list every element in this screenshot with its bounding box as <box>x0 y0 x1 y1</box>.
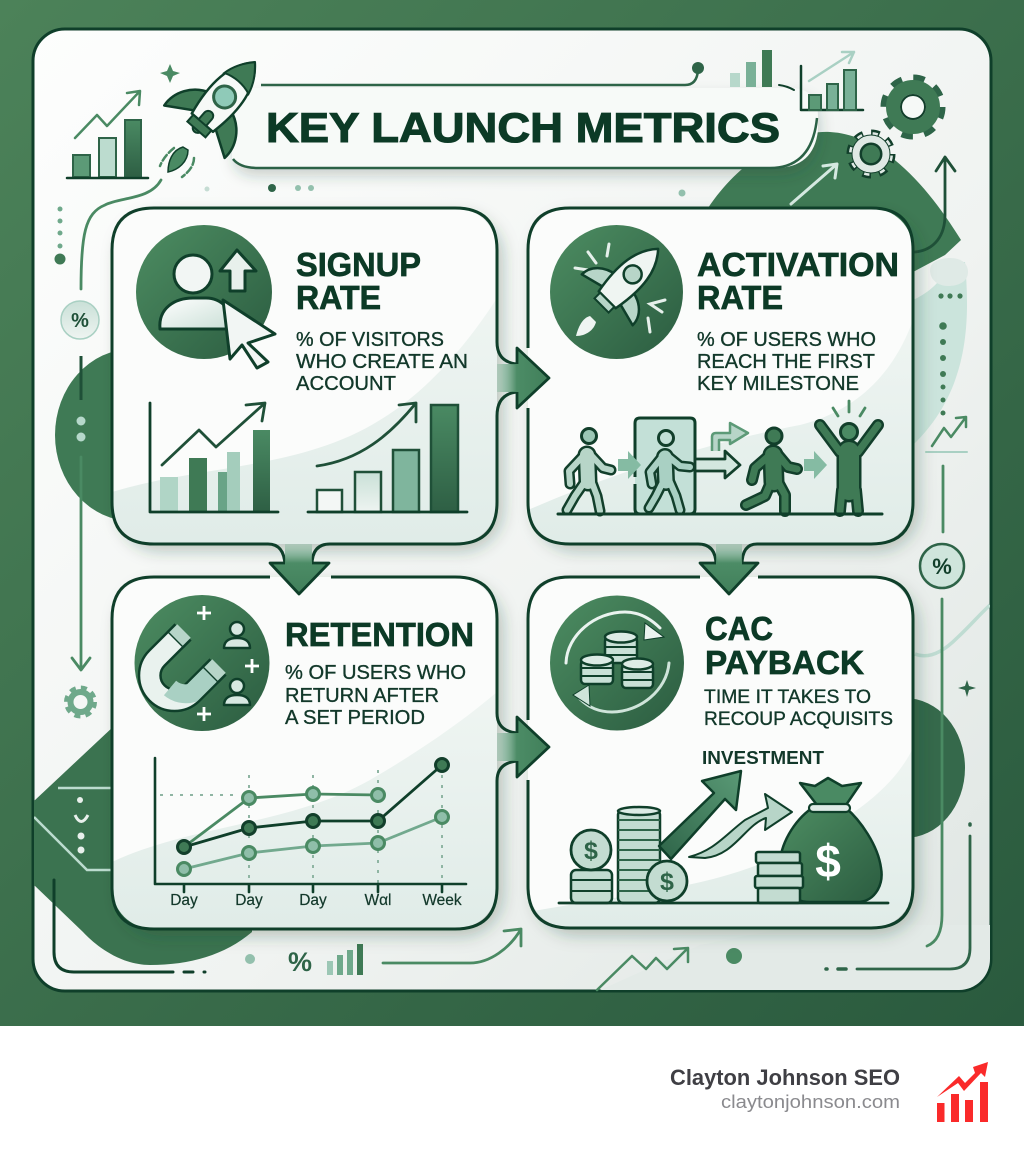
walker 2 <box>649 430 690 510</box>
heading: cac payback: PAYBACK <box>705 644 864 681</box>
icon: sparkle <box>160 64 180 83</box>
flow diagram: user journey <box>558 401 882 514</box>
arrow bent <box>712 423 748 451</box>
arrow 1 <box>618 451 641 479</box>
description: activation rate: REACH THE FIRST <box>697 351 875 373</box>
icon: user signup <box>136 225 275 368</box>
bar chart: rising bars <box>308 403 467 512</box>
coin stack left: $ <box>584 837 598 865</box>
icon: percent badge left <box>61 301 99 339</box>
arrow 2 <box>804 451 827 479</box>
icon: sparkle right <box>958 680 976 697</box>
decor: bottom-left line <box>54 880 205 972</box>
heading: cac payback <box>705 610 864 681</box>
walker 3 <box>746 428 797 511</box>
icon: large gear <box>885 79 941 135</box>
description: retention: A SET PERIOD <box>285 707 425 729</box>
icon: top-left growth chart <box>67 91 148 178</box>
decor: left vertical line with arrow <box>72 356 90 670</box>
decor: bottom percent and bars <box>245 944 363 977</box>
money bag: $ <box>815 835 841 887</box>
arrow: signup to activation <box>497 348 549 408</box>
footer brand text: Clayton Johnson SEO <box>670 1065 900 1090</box>
icon: left gear <box>68 689 94 715</box>
decor: bottom-right lines <box>826 599 970 969</box>
panel: retention <box>112 577 517 929</box>
heading: signup rate: SIGNUP <box>296 246 421 283</box>
line chart: retention curves: Week <box>422 892 462 909</box>
walker 1 <box>567 428 611 511</box>
arrow: bottom curved line <box>383 929 521 963</box>
line chart: retention curves: Day <box>170 892 198 909</box>
title: KEY LAUNCH METRICS <box>266 104 780 151</box>
decor: bottom dot <box>726 948 742 964</box>
description: signup rate: % OF VISITORS <box>296 329 444 351</box>
icon: percent badge right <box>920 544 964 588</box>
illustration: coins, arrows, money bag <box>559 771 888 903</box>
decor: right dotted trail <box>926 293 967 532</box>
description: activation rate <box>697 329 876 395</box>
decor: connector and dots <box>54 180 686 289</box>
icon: small gear <box>851 134 891 174</box>
decor: bottom zigzag <box>597 948 688 990</box>
description: activation rate: % OF USERS WHO <box>697 329 876 351</box>
footer brand text <box>670 1065 900 1112</box>
description: cac payback: RECOUP ACQUISITS <box>704 709 893 730</box>
icon: top right small bars <box>730 50 794 90</box>
money bag <box>780 778 882 902</box>
icon: top right chart <box>801 52 863 110</box>
title banner <box>232 62 818 168</box>
footer brand text: claytonjohnson.com <box>721 1091 900 1112</box>
arrow: signup to retention <box>270 544 329 594</box>
arrow: light diagonal in blob <box>791 164 837 204</box>
person celebrating <box>820 401 878 511</box>
icon: coins cycle <box>550 596 684 730</box>
line chart: retention curves: Wαl <box>364 892 392 909</box>
heading: signup rate <box>296 246 421 316</box>
heading: signup rate: RATE <box>296 279 381 316</box>
line chart: retention curves: Day <box>299 892 327 909</box>
icon: percent badge left: % <box>71 310 89 332</box>
icon: percent badge right: % <box>932 554 952 579</box>
description: activation rate: KEY MILESTONE <box>697 373 859 395</box>
description: cac payback <box>704 687 893 730</box>
icon: rocket launch <box>550 223 684 359</box>
background blobs <box>34 132 992 992</box>
description: retention <box>285 662 466 729</box>
heading: activation rate: RATE <box>697 279 783 316</box>
line chart: retention curves: Day <box>235 892 263 909</box>
heading: retention: RETENTION <box>285 616 474 653</box>
icon: rocket with flame <box>160 36 285 177</box>
line chart: retention curves <box>155 758 466 909</box>
main panel <box>33 29 991 991</box>
label: investment: INVESTMENT <box>702 748 824 768</box>
heading: activation rate <box>697 246 899 316</box>
panel: cac payback <box>528 577 913 928</box>
description: cac payback: TIME IT TAKES TO <box>704 687 871 708</box>
arrow: up arrow right <box>915 157 955 252</box>
arrow outlined <box>695 451 740 478</box>
description: retention: % OF USERS WHO <box>285 662 466 684</box>
footer logo <box>937 1062 988 1122</box>
small coin stack <box>755 852 803 903</box>
coin stack left <box>571 830 612 903</box>
bar chart: combo <box>150 403 278 512</box>
heading: cac payback: CAC <box>705 610 773 647</box>
doorway <box>635 418 695 514</box>
front coin <box>647 861 687 901</box>
big diagonal arrow <box>659 771 741 859</box>
description: retention: RETURN AFTER <box>285 685 439 707</box>
arrow: activation to cac <box>700 544 758 594</box>
tall coin stack <box>618 807 660 903</box>
front coin: $ <box>660 868 674 896</box>
icon: magnet and users <box>134 595 270 731</box>
wavy light arrow <box>689 794 792 858</box>
decor: bottom percent and bars: % <box>288 947 312 977</box>
description: signup rate: WHO CREATE AN <box>296 351 468 373</box>
arrow: retention to cac <box>497 717 549 777</box>
panel: activation rate <box>528 208 913 565</box>
description: signup rate: ACCOUNT <box>296 373 396 395</box>
heading: activation rate: ACTIVATION <box>697 246 899 283</box>
description: signup rate <box>296 329 468 395</box>
panel: signup rate <box>112 208 517 565</box>
